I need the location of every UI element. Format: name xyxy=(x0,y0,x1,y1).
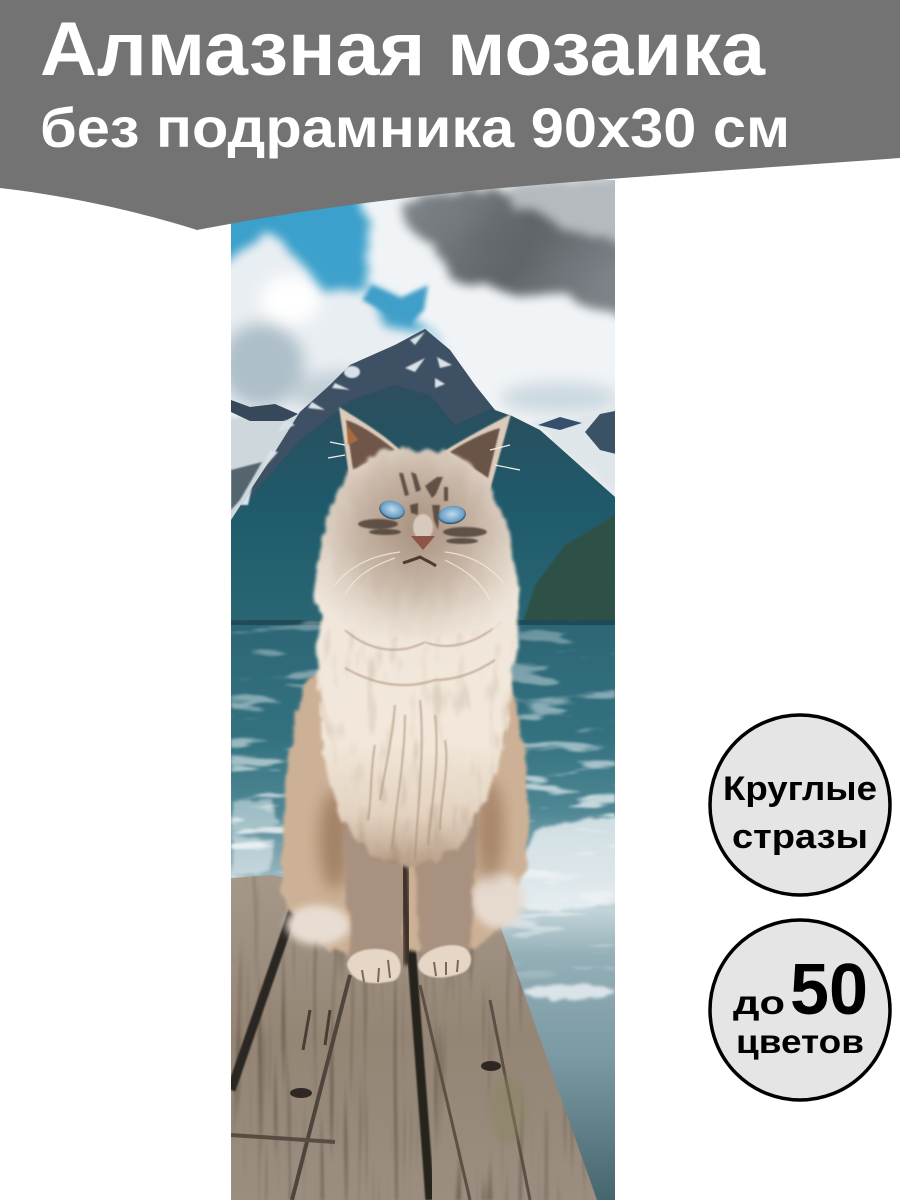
title: Алмазная мозаика xyxy=(40,7,766,92)
cat xyxy=(281,407,528,983)
gray title banner xyxy=(0,0,900,230)
subtitle: без подрамника 90х30 см xyxy=(40,96,790,159)
cat eyes xyxy=(379,500,466,524)
wooden pier xyxy=(231,875,597,1200)
sky and clouds xyxy=(231,180,615,497)
cat legs and paws xyxy=(342,815,478,983)
cat whiskers xyxy=(335,552,505,600)
badge: up to 50 colours: 50 xyxy=(790,950,868,1030)
cat body xyxy=(281,665,528,955)
cat chest fur xyxy=(318,590,518,865)
badge: up to 50 colours xyxy=(710,920,890,1100)
badge: up to 50 colours: цветов xyxy=(736,1023,864,1060)
mountain xyxy=(231,329,615,625)
cat nose and mouth xyxy=(403,536,436,566)
badge: round rhinestones: Круглые xyxy=(723,770,877,808)
badge: up to 50 colours: до xyxy=(733,984,785,1021)
lake xyxy=(231,620,625,1200)
cat head xyxy=(316,449,518,638)
badge: round rhinestones: стразы xyxy=(732,818,868,856)
distant snowy ridges xyxy=(231,400,615,520)
badge: round rhinestones xyxy=(710,715,890,895)
cat ears xyxy=(328,407,520,490)
picture: cat on a pier xyxy=(231,180,615,1200)
